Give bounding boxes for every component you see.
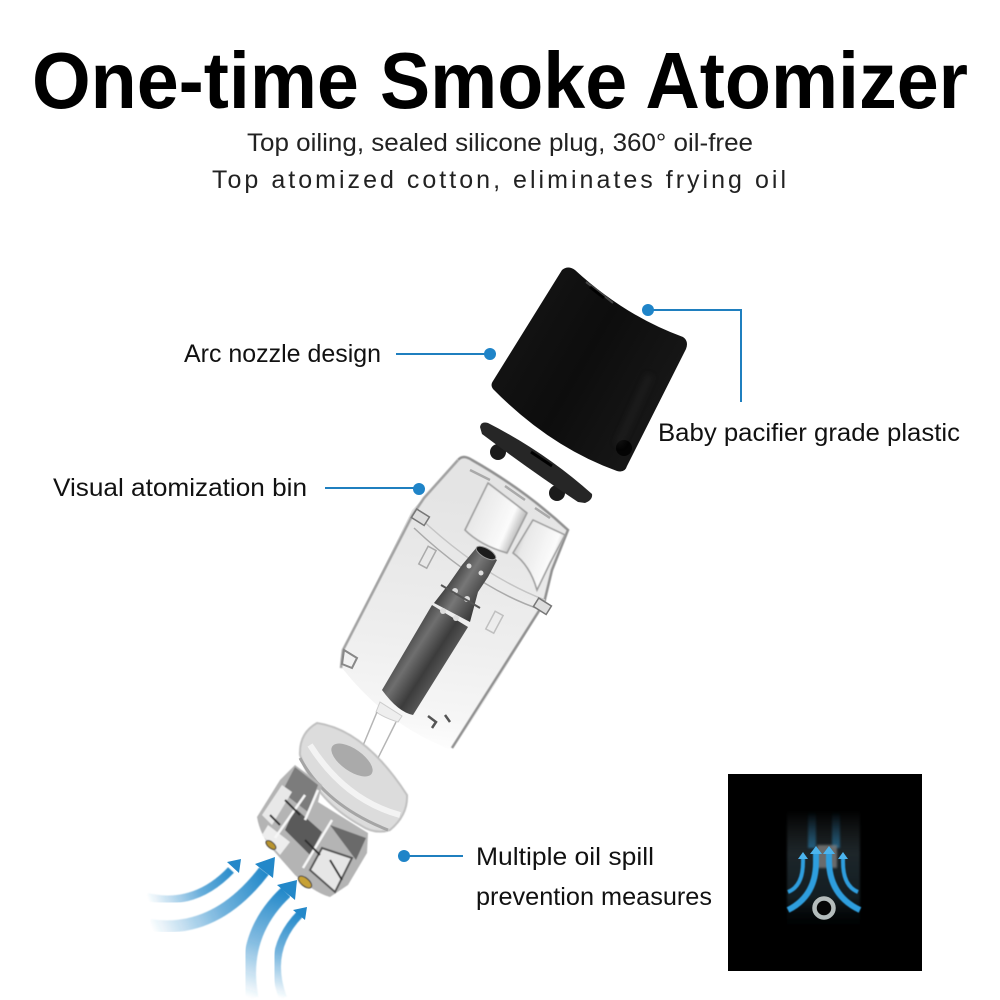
airflow inset panel	[728, 774, 922, 971]
side clips	[411, 509, 429, 525]
title: One-time Smoke Atomizer	[32, 36, 968, 125]
label: visual atomization bin: Visual atomization bin	[53, 474, 307, 502]
sealing plate	[480, 422, 592, 503]
leader: oil spill prevention	[398, 850, 463, 862]
airflow arrows	[147, 857, 307, 998]
label: multiple oil spill prevention measures	[476, 843, 712, 911]
wick and pins	[376, 702, 402, 722]
leader: visual atomization bin	[325, 483, 425, 495]
label: multiple oil spill prevention measures: Multiple oil spill	[476, 843, 654, 871]
label: arc nozzle design: Arc nozzle design	[184, 340, 381, 368]
subtitle line 2: Top atomized cotton, eliminates frying oil	[212, 166, 786, 194]
inner chambers	[465, 483, 527, 553]
label: multiple oil spill prevention measures: prevention measures	[476, 883, 712, 911]
visual atomization bin	[340, 457, 568, 762]
central tube	[434, 547, 497, 622]
base module	[257, 765, 368, 897]
subtitle line 1: Top oiling, sealed silicone plug, 360° oil-free	[247, 129, 753, 157]
label: baby pacifier grade plastic: Baby pacifier grade plastic	[658, 419, 960, 447]
leader: arc nozzle design	[396, 348, 496, 360]
base cup	[300, 723, 407, 832]
leader: baby pacifier grade plastic	[642, 304, 741, 402]
nozzle cap	[492, 268, 687, 471]
